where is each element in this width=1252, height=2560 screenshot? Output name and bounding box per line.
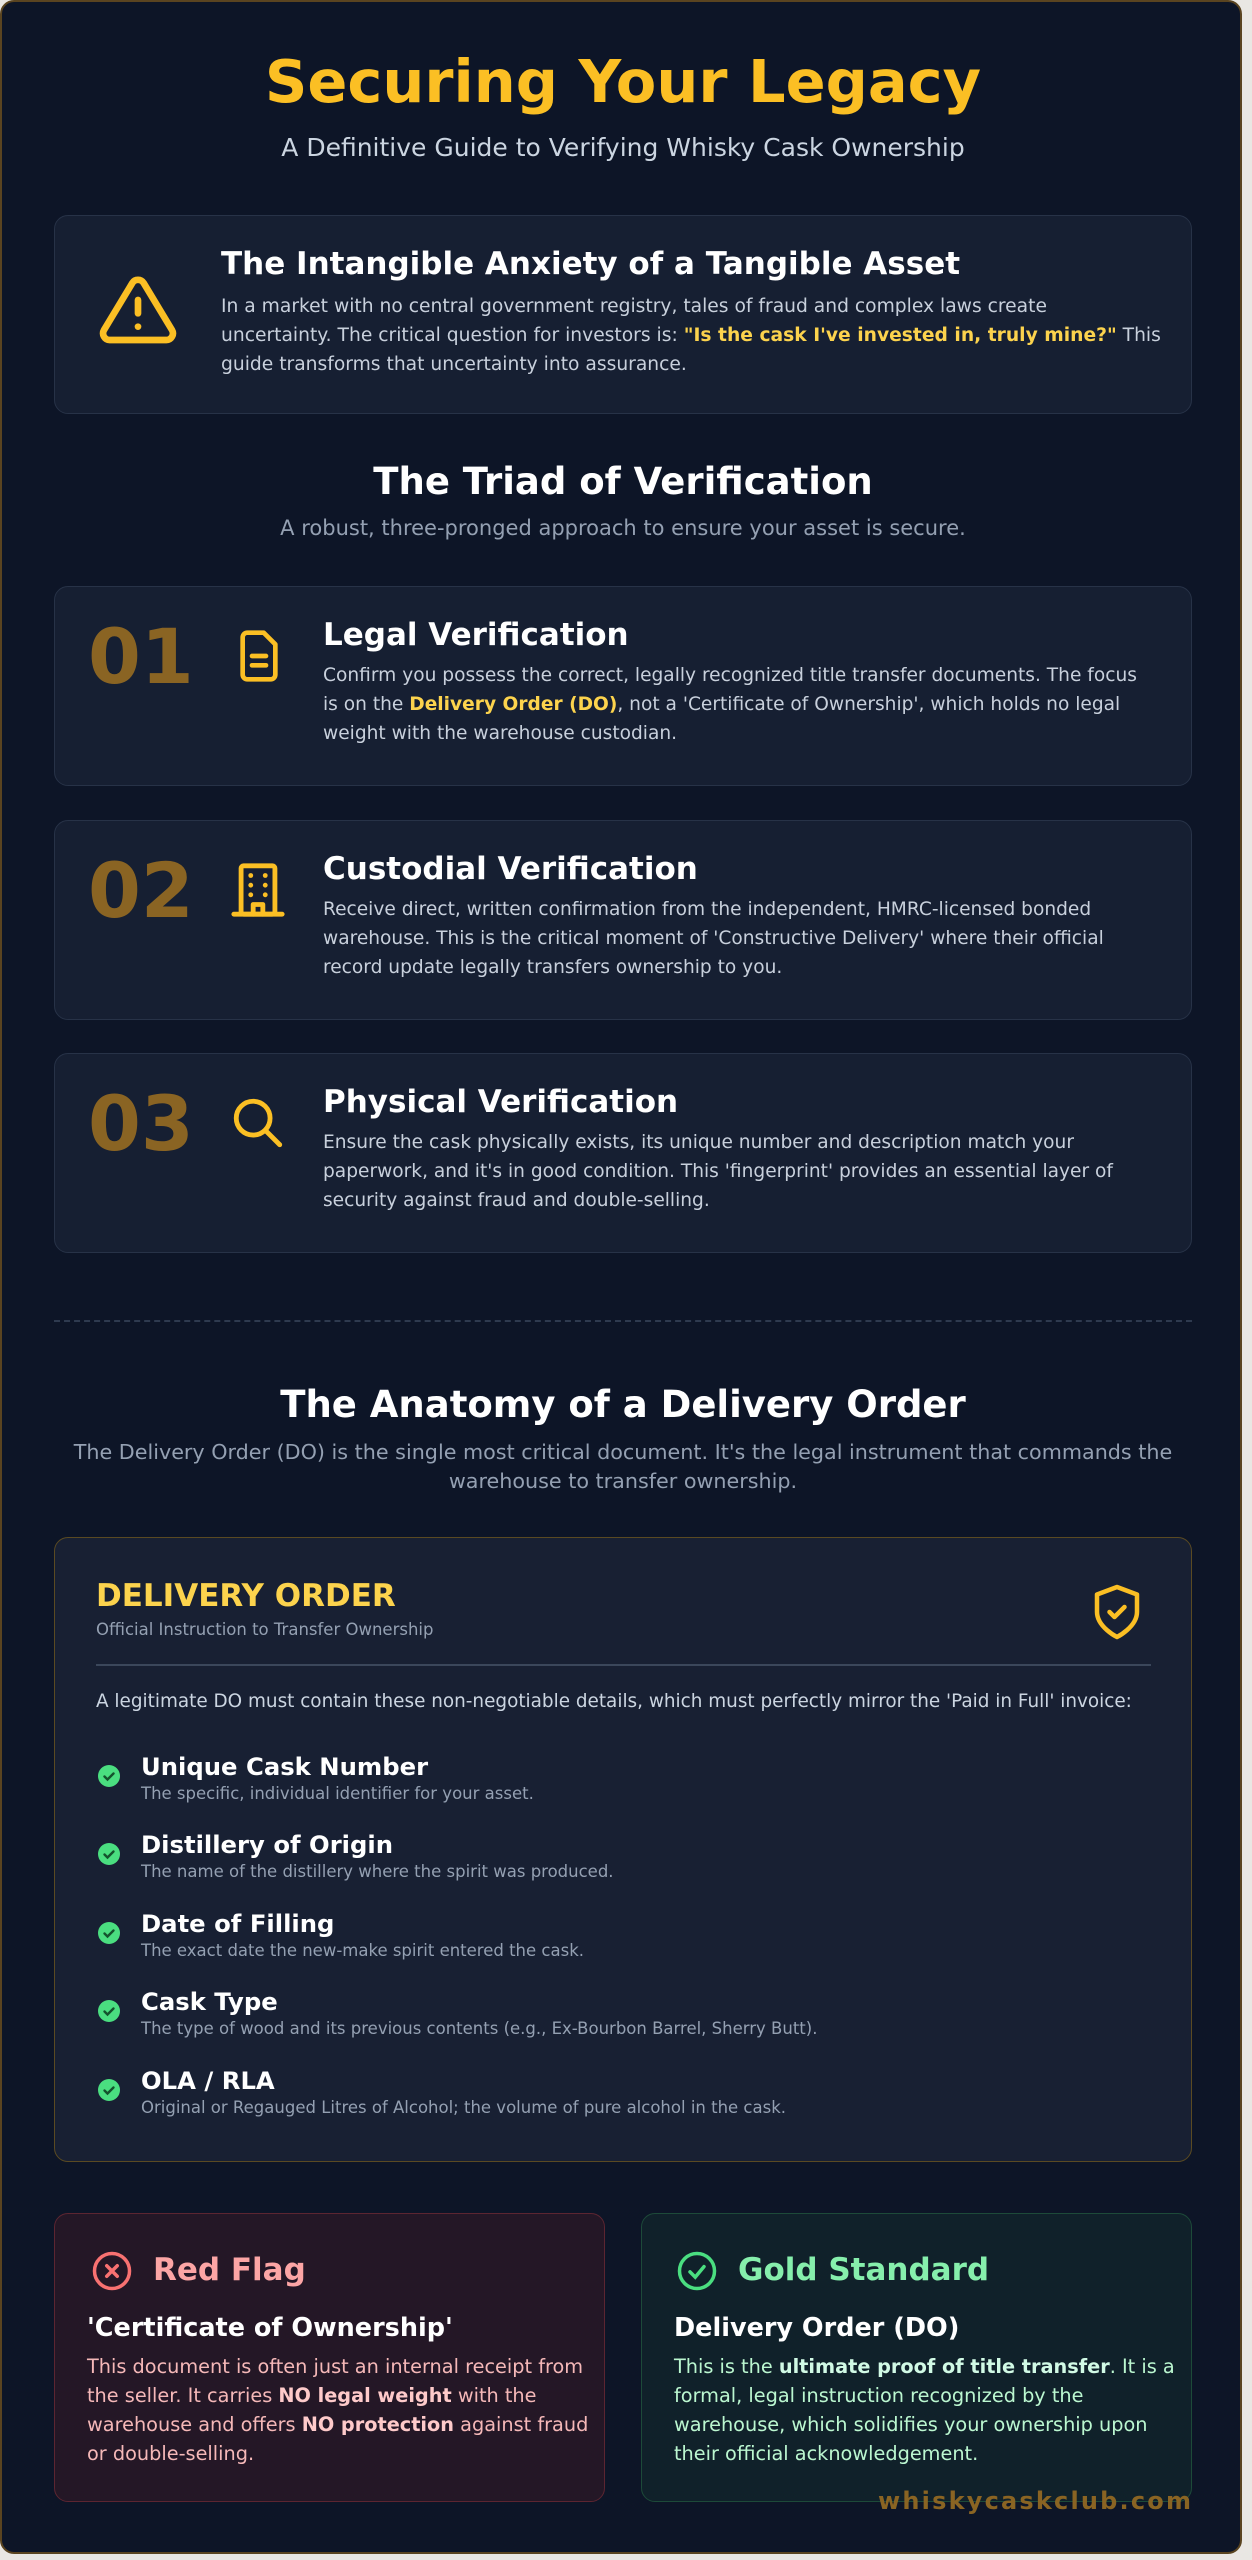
title: Securing Your Legacy bbox=[265, 47, 981, 116]
heading: intangible anxiety: The Intangible Anxiety of a Tangible Asset bbox=[221, 246, 960, 282]
heading: gold standard: Gold Standard bbox=[738, 2252, 989, 2288]
subtitle: triad: A robust, three-pronged approach to ensure your asset is secure. bbox=[280, 516, 966, 540]
subheading: 'Certificate of Ownership' bbox=[87, 2313, 453, 2343]
heading: Custodial Verification bbox=[323, 851, 698, 887]
item: date of filling: Date of Filling bbox=[141, 1909, 334, 1938]
watermark: whiskycaskclub.com bbox=[878, 2487, 1193, 2515]
heading: DELIVERY ORDER: DELIVERY ORDER bbox=[96, 1578, 396, 1614]
text: Ensure the cask physically exists, its unique number and description match your paperwork, and it's in good condition. This 'fingerprint' provides an essential layer of security against fraud and double-selling. bbox=[323, 1132, 1113, 1211]
item: OLA / RLA: Original or Regauged Litres of Alcohol; the volume of pure alcohol in the cask. bbox=[141, 2098, 786, 2117]
item: cask type bbox=[98, 1987, 817, 2038]
text: intro body: In a market with no central government registry, tales of fraud and complex laws create bbox=[221, 296, 1047, 317]
panel: legal verification bbox=[54, 586, 1192, 786]
item: unique cask number: Unique Cask Number bbox=[141, 1752, 428, 1781]
text: Receive direct, written confirmation from the independent, HMRC-licensed bonded warehouse. This is the critical moment of 'Constructive Delivery' where their official record update legally transfers ownership to you. bbox=[323, 899, 1104, 978]
icon: building bbox=[231, 863, 285, 917]
text: formal, legal instruction recognized by the bbox=[674, 2384, 1084, 2407]
text: DO intro: A legitimate DO must contain these non-negotiable details, which must perfectly mirror the 'Paid in Full' invoice: bbox=[96, 1691, 1132, 1712]
item: OLA / RLA bbox=[98, 2066, 786, 2117]
number 03: 03 bbox=[88, 1079, 194, 1168]
panel: custodial verification bbox=[54, 820, 1192, 1020]
text: This document is often just an internal receipt from bbox=[87, 2355, 583, 2378]
text: intro body bbox=[221, 296, 1161, 375]
item: unique cask number: The specific, individual identifier for your asset. bbox=[141, 1784, 534, 1803]
text: intro body: uncertainty. The critical question for investors is: "Is the cask I've invested in, truly mine?" This bbox=[221, 325, 1161, 346]
heading: Legal Verification bbox=[323, 617, 629, 653]
text bbox=[86, 2355, 588, 2465]
text: This is the ultimate proof of title transfer. It is a bbox=[674, 2355, 1175, 2378]
subheading: Delivery Order (DO) bbox=[674, 2313, 959, 2343]
panel: physical verification bbox=[54, 1053, 1192, 1253]
subtitle: anatomy bbox=[74, 1440, 1172, 1493]
heading: Physical Verification bbox=[323, 1084, 678, 1120]
item: date of filling bbox=[98, 1909, 584, 1960]
panel: red flag bbox=[54, 2213, 605, 2502]
item: distillery of origin: The name of the distillery where the spirit was produced. bbox=[141, 1862, 614, 1881]
subtitle: A Definitive Guide to Verifying Whisky Cask Ownership bbox=[281, 133, 965, 162]
icon: x circle bbox=[92, 2252, 132, 2290]
number 02: 02 bbox=[88, 846, 194, 935]
item: unique cask number bbox=[98, 1752, 534, 1803]
text: the seller. It carries NO legal weight with the bbox=[87, 2384, 536, 2407]
panel: gold standard bbox=[641, 2213, 1192, 2502]
text: their official acknowledgement. bbox=[674, 2442, 978, 2465]
number 01: 01 bbox=[88, 612, 194, 701]
heading: anatomy: The Anatomy of a Delivery Order bbox=[280, 1383, 966, 1426]
heading: red flag: Red Flag bbox=[153, 2252, 306, 2288]
text: warehouse and offers NO protection against fraud bbox=[87, 2413, 588, 2436]
subtitle: anatomy: The Delivery Order (DO) is the single most critical document. It's the legal instrument that commands the bbox=[74, 1440, 1172, 1464]
item: cask type: Cask Type bbox=[141, 1987, 278, 2016]
icon: check circle bbox=[678, 2252, 716, 2290]
panel: delivery order bbox=[54, 1537, 1192, 2162]
item: OLA / RLA: OLA / RLA bbox=[141, 2066, 275, 2095]
text: Confirm you possess the correct, legally recognized title transfer documents. The focus is on the Delivery Order (DO), not a 'Certificate of Ownership', which holds no legal weight with the warehouse custodian. bbox=[323, 665, 1137, 744]
heading: triad: The Triad of Verification bbox=[373, 460, 873, 503]
subtitle: official instruction: Official Instruction to Transfer Ownership bbox=[96, 1620, 433, 1639]
panel: intro anxiety bbox=[54, 215, 1192, 414]
item: distillery of origin: Distillery of Origin bbox=[141, 1830, 393, 1859]
item: date of filling: The exact date the new-make spirit entered the cask. bbox=[141, 1941, 584, 1960]
text: warehouse, which solidifies your ownership upon bbox=[674, 2413, 1148, 2436]
subtitle: anatomy: warehouse to transfer ownership. bbox=[449, 1469, 797, 1493]
item: distillery of origin bbox=[98, 1830, 614, 1881]
text: intro body: guide transforms that uncertainty into assurance. bbox=[221, 354, 687, 375]
icon: document bbox=[240, 630, 278, 682]
text bbox=[674, 2355, 1175, 2465]
icon: warning bbox=[100, 276, 176, 344]
icon: shield bbox=[1094, 1584, 1140, 1640]
icon: magnifier bbox=[234, 1098, 282, 1148]
text: or double-selling. bbox=[87, 2442, 254, 2465]
item: cask type: The type of wood and its previous contents (e.g., Ex-Bourbon Barrel, Sherry Butt). bbox=[141, 2019, 817, 2038]
